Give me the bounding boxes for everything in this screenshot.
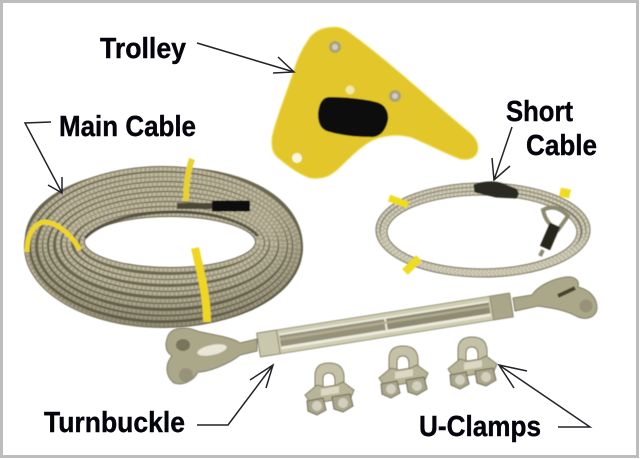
coil shadow at the hole (85, 212, 258, 238)
cable ends (177, 203, 250, 209)
short cable (378, 182, 588, 275)
label: Short Cable: Short (506, 96, 573, 128)
arrow: main cable (25, 122, 62, 193)
U-clamps (305, 337, 497, 415)
label: Trolley: Trolley (100, 33, 186, 65)
short cable sleeve (474, 182, 518, 198)
turnbuckle (166, 277, 597, 384)
main cable coil (25, 159, 303, 327)
arrow: short cable (492, 127, 512, 180)
label: Short Cable: Cable (526, 130, 597, 162)
label: Main Cable: Main Cable (59, 111, 196, 143)
threaded rod (279, 319, 386, 347)
turnbuckle collars (257, 330, 280, 357)
snap ring and ferrule (540, 208, 568, 256)
label: U-Clamps: U-Clamps (419, 411, 541, 443)
short cable ties (389, 192, 570, 272)
turnbuckle body frame (257, 293, 513, 357)
left jaw (166, 328, 257, 384)
arrow: U-clamps (499, 365, 590, 427)
arrow: trolley (197, 43, 294, 73)
trolley bolts (292, 41, 401, 163)
label: Turnbuckle: Turnbuckle (44, 407, 185, 439)
trolley peg (318, 97, 388, 137)
yellow cable tie: top (186, 159, 192, 201)
label: Short Cable (506, 96, 597, 162)
trolley plate (272, 27, 478, 179)
yellow cable tie: bottom (195, 248, 207, 322)
arrow: turnbuckle (197, 365, 273, 425)
yellow cable tie: left (27, 222, 80, 252)
right jaw (513, 277, 597, 318)
